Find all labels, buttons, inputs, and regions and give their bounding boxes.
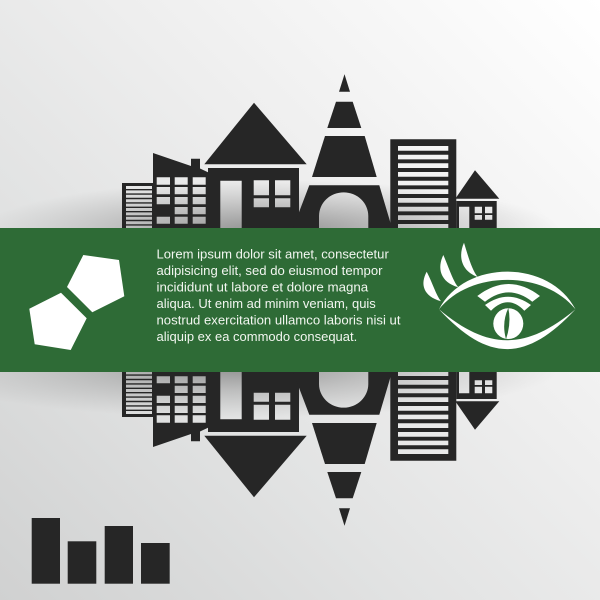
lower eyelid	[439, 309, 576, 349]
pupil	[493, 308, 523, 339]
tower: tip	[339, 74, 350, 92]
house: small body	[456, 201, 497, 228]
building: tall striped	[390, 139, 456, 228]
house: small roof	[455, 170, 499, 199]
text block: Lorem ipsum dolor sit amet, consectetur	[156, 246, 389, 261]
text block: adipisicing elit, sed do eiusmod tempor	[156, 263, 383, 278]
text block	[156, 246, 401, 344]
text block: incididunt ut labore et dolore magna	[156, 279, 369, 294]
building: low striped	[122, 183, 153, 228]
text block: nostrud exercitation ullamco laboris nisi ut	[156, 312, 401, 327]
building: angled roof with chimney	[153, 153, 208, 228]
icon: eye with wifi	[423, 243, 576, 349]
upper eyelid	[439, 272, 576, 309]
wifi arcs	[477, 284, 540, 311]
text block: aliquip ex ea commodo consequat.	[156, 329, 357, 344]
house: large roof	[204, 103, 307, 164]
text block: aliqua. Ut enim ad minim veniam, quis	[156, 296, 376, 311]
skyline	[122, 74, 499, 228]
tower: middle segment	[312, 136, 377, 177]
icon: two pentagons	[29, 255, 124, 350]
bar chart icon	[32, 518, 170, 584]
skyline reflection	[122, 372, 499, 526]
house: large body	[208, 168, 299, 228]
green band	[0, 228, 600, 372]
eyelashes	[423, 243, 478, 301]
tower: arched base	[293, 185, 392, 228]
tower: upper segment	[327, 102, 361, 128]
pupil slit	[504, 308, 509, 339]
